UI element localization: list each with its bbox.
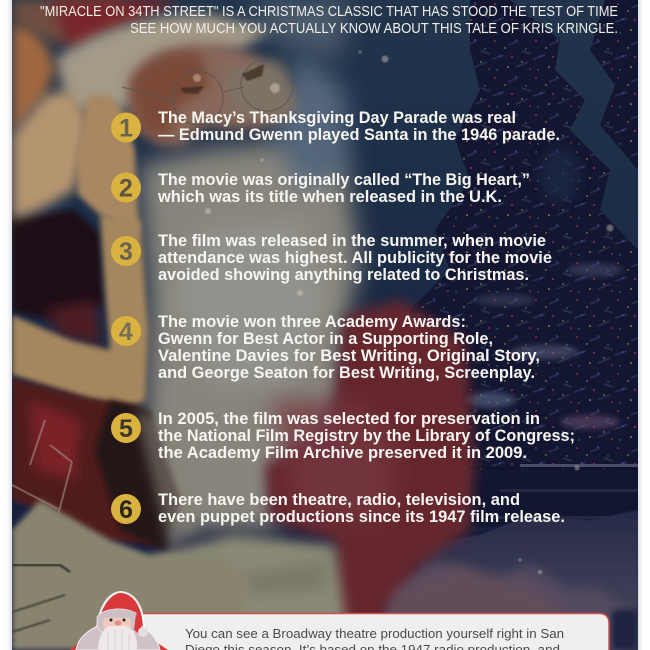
fact 2 [111,171,530,206]
fact 3: attendance was highest. All publicity for the movie [158,249,552,267]
fact 1: — Edmund Gwenn played Santa in the 1946 parade. [158,126,560,144]
beard [140,140,360,530]
fact 4: and George Seaton for Best Writing, Screenplay. [158,364,535,382]
snow flecks [193,50,614,574]
medal 6 [111,494,141,524]
glove [12,498,205,650]
fact 5: In 2005, the film was selected for preservation in [158,410,540,428]
fact 2: The movie was originally called “The Big Heart,” [158,171,530,189]
fur strip [135,410,200,550]
callout box [140,614,609,650]
fact 3: The film was released in the summer, when movie [158,232,546,250]
medal 2: 2 [119,174,133,202]
fact 5: the National Film Registry by the Library of Congress; [158,427,575,445]
fact 5: the Academy Film Archive preserved it in 2009. [158,444,527,462]
fact 4: The movie won three Academy Awards: [158,313,466,331]
child arm [12,215,148,408]
fence rails [490,464,638,519]
hat and fur [12,0,130,45]
medal 3 [111,236,141,266]
fact 5 [111,410,575,462]
medal 1 [111,112,141,142]
header text [40,4,618,37]
fact 6 [111,491,565,526]
glasses [122,59,293,125]
medal 4: 4 [119,318,133,346]
medal 5 [111,413,141,443]
child hand [75,95,140,235]
santa face [128,44,291,147]
glove cuff [148,530,352,613]
callout box: You can see a Broadway theatre production yourself right in San [185,627,564,641]
snow drifts [420,510,638,650]
medal 4 [111,316,141,346]
fact 3: avoided showing anything related to Christmas. [158,266,529,284]
fact 4: Gwenn for Best Actor in a Supporting Role, [158,330,493,348]
fact 6: even puppet productions since its 1947 film release. [158,508,565,526]
icon: Santa illustration [70,591,168,650]
fact 2: which was its title when released in the U.K. [157,188,502,206]
fact 4 [111,313,540,382]
santa coat red [265,300,475,650]
child dress dark [12,210,103,320]
fact 4: Valentine Davies for Best Writing, Original Story, [158,347,540,365]
fact 6: There have been theatre, radio, television, and [158,491,520,509]
medal 2 [111,172,141,202]
medal 1: 1 [119,114,133,142]
medal 6: 6 [119,496,133,524]
fact 1 [111,109,560,144]
fact 1: The Macy’s Thanksgiving Day Parade was real [158,109,516,127]
child hair and face [12,25,55,135]
medal 3: 3 [119,238,133,266]
plaid dress [12,378,165,545]
trees with lights [395,0,638,470]
fact 3 [111,232,552,284]
medal 5: 5 [119,415,133,443]
